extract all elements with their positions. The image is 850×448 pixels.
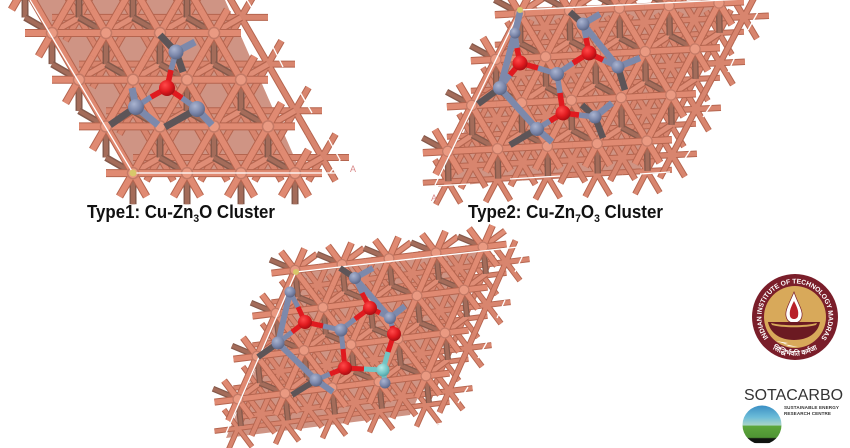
cluster: Zn7O3 [478, 12, 640, 145]
caption: type 2: O [581, 202, 594, 222]
logo: Sotacarbo [742, 387, 843, 444]
tagline: RESEARCH CENTRE [784, 411, 831, 416]
caption: type 1: O Cluster [199, 202, 275, 222]
lamp bowl [768, 322, 820, 340]
lattice: copper slab type 3 [205, 223, 539, 448]
outline: type 2 cell [435, 0, 758, 186]
motto: सिद्धिर्भवति कर्मजा [772, 344, 818, 356]
seal centre [764, 286, 826, 348]
axis label A: A [350, 164, 356, 174]
caption: type 2: 3 [594, 213, 600, 225]
tagline [784, 405, 839, 416]
lattice: copper slab type 2 [411, 0, 781, 206]
flame core [790, 301, 798, 319]
outline: type 1 cell [30, 0, 340, 173]
caption: type 2: Cluster [600, 202, 663, 222]
caption: type 1: 3 [193, 213, 199, 225]
lightning [776, 341, 798, 347]
lamp flame [786, 292, 802, 323]
globe [742, 406, 782, 444]
logo: IIT Madras [752, 274, 838, 360]
tagline: SUSTAINABLE ENERGY [784, 405, 839, 410]
caption: type 2: 7 [575, 213, 581, 225]
wordmark: SOTACARBO [744, 387, 843, 404]
outline: type 3 cell [223, 247, 523, 440]
bowl rim [771, 323, 817, 327]
caption: type 2: Type2: Cu-Zn [468, 202, 582, 222]
origin marker type 3 [293, 269, 299, 275]
cluster: Zn7O3 with cyan dopant [258, 268, 405, 395]
panel: Type3 lattice with dopant [205, 223, 539, 448]
ring text: INDIAN INSTITUTE OF TECHNOLOGY MADRAS [756, 278, 834, 340]
panel: Type1 Cu-Zn3O lattice [0, 0, 362, 204]
axis label A type 2: A [431, 193, 437, 203]
origin marker type 2 [517, 7, 523, 13]
origin marker [130, 170, 136, 176]
cluster: Zn3O [110, 35, 212, 127]
seal ring [752, 274, 838, 360]
caption: type 1: Type1: Cu-Zn [87, 202, 201, 222]
lattice: copper slab type 1 [0, 0, 362, 204]
panel: Type2 Cu-Zn7O3 lattice [411, 0, 781, 206]
